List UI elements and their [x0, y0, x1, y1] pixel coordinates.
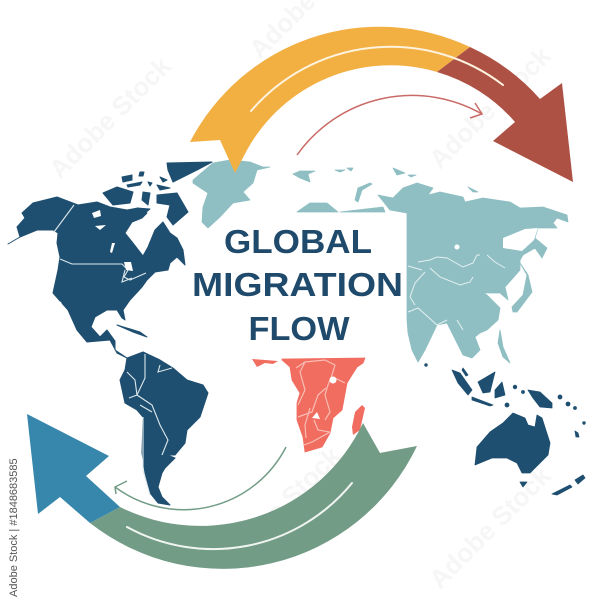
map: Africa [252, 358, 365, 452]
top arrow: orange to red [190, 27, 573, 182]
map: Oceania [425, 364, 585, 495]
Hudson Bay and lakes [92, 210, 133, 271]
title: GLOBAL [224, 224, 372, 261]
West Africa fragment [252, 359, 278, 367]
title [192, 224, 403, 348]
South America [120, 352, 208, 505]
Europe remnants [293, 168, 478, 212]
Americas borders [54, 205, 172, 495]
faint watermark: Adobe Stock [213, 440, 347, 574]
Bohai sea and lake [454, 228, 538, 307]
map: Americas [8, 162, 212, 505]
white highlight [251, 47, 503, 111]
North America [8, 197, 185, 358]
faint watermark: Adobe Stock [423, 40, 557, 174]
title: MIGRATION [192, 267, 403, 304]
Australia [475, 413, 550, 473]
Arctic islands [103, 162, 212, 225]
title: FLOW [248, 311, 350, 348]
Philippines [498, 330, 510, 363]
red arrowhead [437, 47, 573, 182]
Tasmania [520, 482, 527, 487]
thin green arrow [115, 447, 286, 510]
faint watermark: Adobe Stock [423, 460, 557, 594]
faint watermark: Adobe Stock [43, 50, 177, 184]
green arc body [90, 423, 417, 569]
lakes [312, 376, 336, 419]
Asia rivers and borders [408, 255, 505, 330]
Madagascar [352, 405, 365, 435]
map: Greenland and Asia [193, 160, 568, 363]
bottom arrow: green to blue [27, 414, 417, 569]
Asia [378, 183, 568, 362]
stock credit: Adobe Stock | #1848683585 [8, 458, 20, 597]
Japan [512, 263, 532, 312]
Africa borders [296, 360, 345, 445]
Indonesia and Papua [425, 364, 585, 437]
white highlight [127, 483, 352, 549]
blue arrowhead [27, 414, 120, 523]
Southern Africa [282, 358, 365, 452]
New Zealand [552, 475, 585, 495]
thin red arrow [297, 95, 482, 155]
orange arc body [190, 27, 470, 173]
Caribbean islands [117, 325, 147, 337]
Greenland [193, 160, 270, 228]
